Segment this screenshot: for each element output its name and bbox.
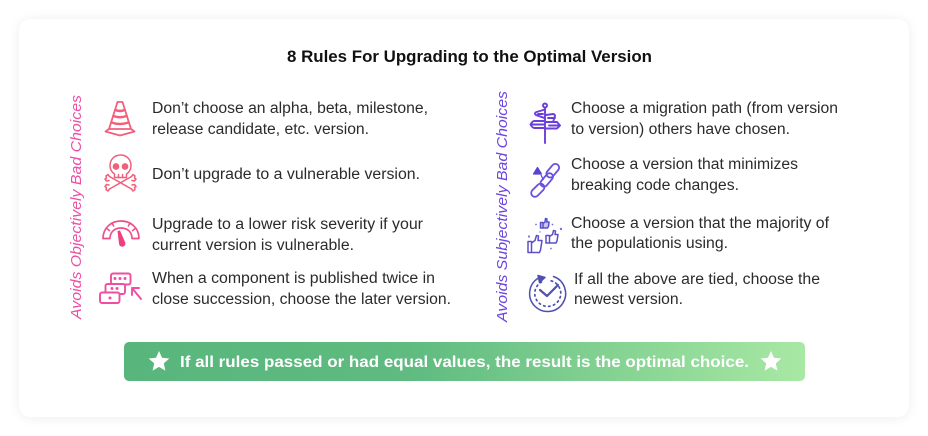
- rule text: left column: close succession, choose the later version.: [152, 291, 451, 308]
- rule text: right column: breaking code changes.: [571, 177, 739, 194]
- rule text: left column: [152, 100, 451, 308]
- icon: traffic cone: [106, 102, 134, 136]
- title: 8 Rules For Upgrading to the Optimal Version: [287, 48, 652, 66]
- icon: signpost: [530, 104, 560, 143]
- icon: thumbs up group: [528, 218, 562, 252]
- right vertical heading: Avoids Subjectively Bad Choices: [494, 90, 511, 323]
- icon: right star: [761, 351, 781, 371]
- icon: broken chain with warning: [530, 162, 561, 198]
- icon: left star: [149, 351, 169, 371]
- icon: stacked messages: [100, 274, 141, 303]
- rule text: right column: to version) others have chosen.: [571, 121, 790, 138]
- rule text: left column: Upgrade to a lower risk severity if your: [152, 216, 423, 233]
- rule text: right column: Choose a version that minimizes: [571, 156, 798, 173]
- rule text: right column: If all the above are tied, choose the: [574, 271, 820, 288]
- icon: clock with check: [530, 276, 566, 312]
- rule text: right column: the populationis using.: [571, 235, 728, 252]
- conclusion banner: [124, 342, 805, 381]
- rule text: right column: Choose a version that the majority of: [571, 215, 830, 232]
- rule text: left column: current version is vulnerable.: [152, 237, 354, 254]
- icon: skull and crossbones: [105, 155, 136, 191]
- banner text: If all rules passed or had equal values, the result is the optimal choice.: [180, 354, 749, 371]
- rule text: left column: Don’t upgrade to a vulnerable version.: [152, 166, 420, 183]
- rule text: left column: release candidate, etc. version.: [152, 121, 369, 138]
- left vertical heading: Avoids Objectively Bad Choices: [68, 94, 85, 320]
- rule text: right column: newest version.: [574, 291, 683, 308]
- rule text: left column: When a component is published twice in: [152, 270, 435, 287]
- rule text: right column: [571, 100, 838, 308]
- rule text: left column: Don’t choose an alpha, beta, milestone,: [152, 100, 428, 117]
- icon: risk gauge: [103, 221, 139, 247]
- rule text: right column: Choose a migration path (from version: [571, 100, 838, 117]
